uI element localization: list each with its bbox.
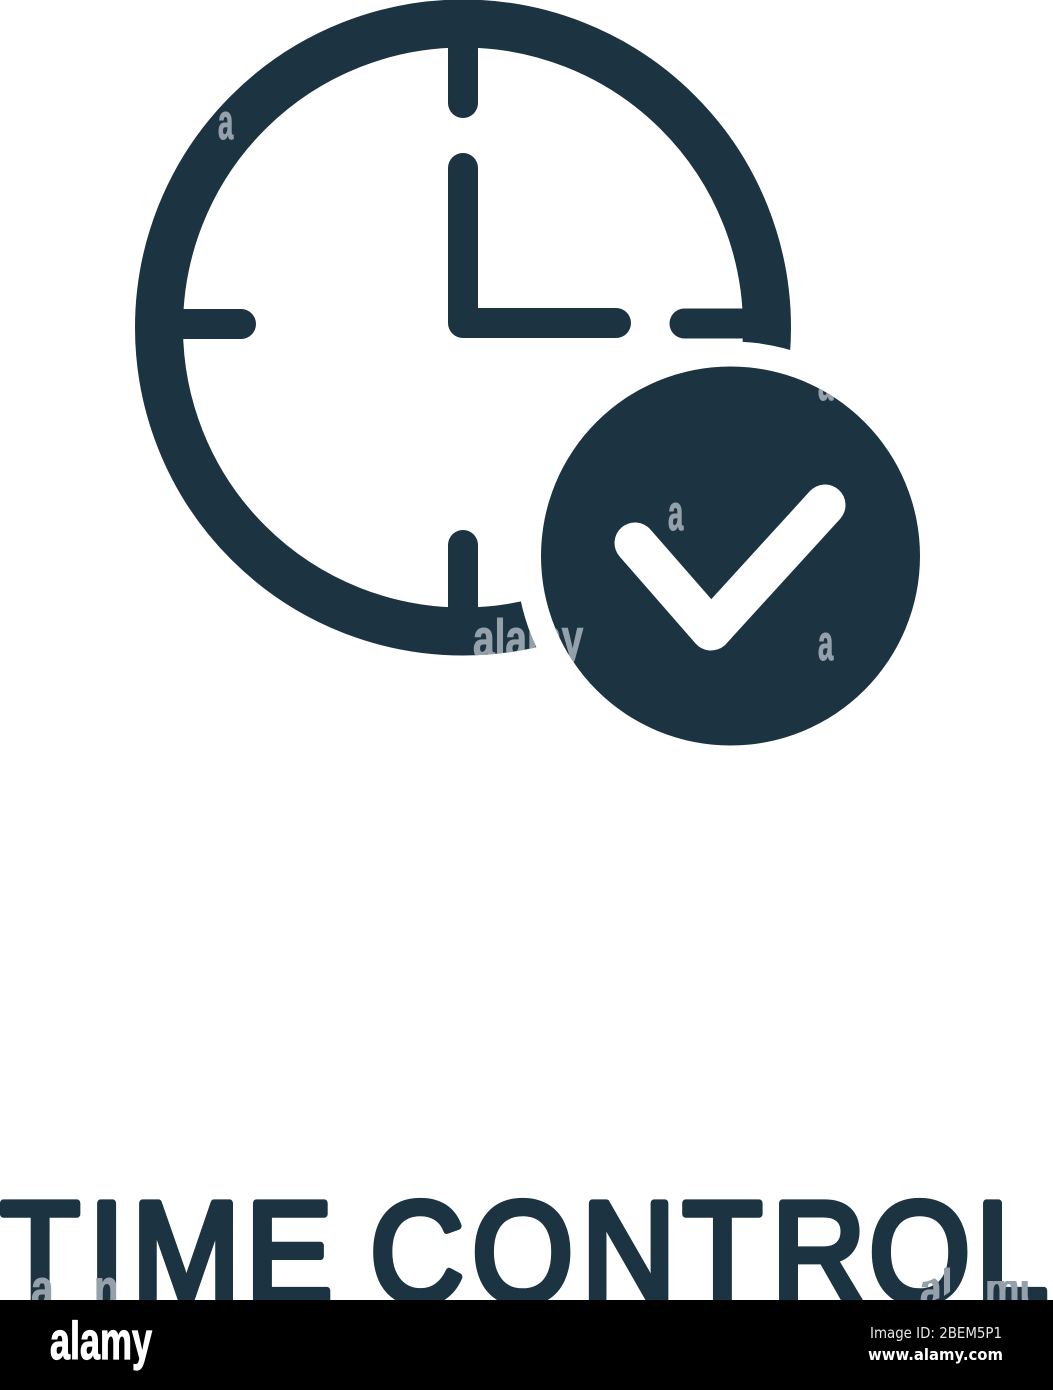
check badge	[541, 366, 920, 746]
watermark marks: a	[818, 354, 834, 411]
website: www.alamy.com	[868, 1345, 1003, 1364]
image id: Image ID: 2BEM5P1	[870, 1324, 1002, 1342]
clock ring	[159, 24, 767, 632]
watermark marks: mu	[985, 1258, 1043, 1318]
icon: clock with check badge	[159, 24, 920, 746]
watermark marks: al	[920, 1258, 952, 1318]
clock hands	[463, 168, 616, 323]
watermark marks: a	[668, 484, 684, 541]
watermark marks: alamy	[473, 608, 583, 668]
watermark marks: n	[94, 1259, 119, 1319]
watermark marks: a	[218, 93, 234, 150]
title: TIME CONTROL	[0, 1172, 1048, 1332]
footer bar	[0, 1300, 1053, 1390]
alamy logo: alamy	[50, 1312, 152, 1371]
clock tick marks	[180, 40, 745, 615]
watermark marks: a	[31, 1259, 54, 1319]
watermark marks: a	[818, 614, 834, 671]
